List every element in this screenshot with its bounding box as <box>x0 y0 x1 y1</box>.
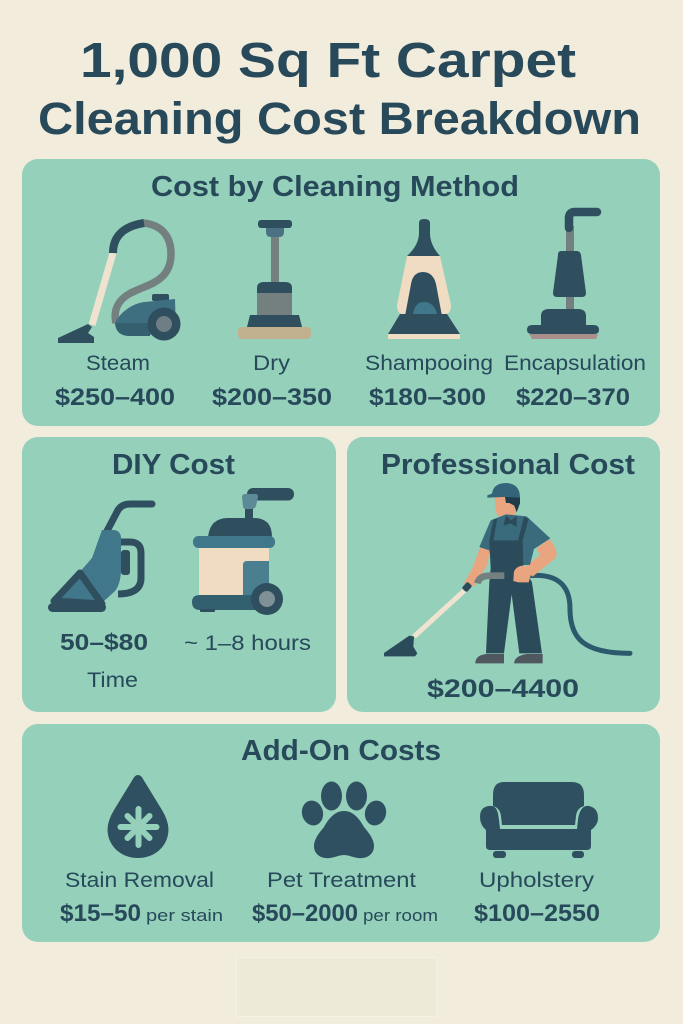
hair <box>505 497 520 512</box>
illustration: worker with carpet wand <box>384 483 630 663</box>
label: stain removal: Stain Removal <box>65 869 214 892</box>
price: pet treatment: $50–2000 <box>252 900 358 927</box>
icon: upright carpet cleaner <box>48 504 152 612</box>
icon: sofa <box>480 782 598 858</box>
price: stain removal <box>60 900 223 927</box>
collar <box>503 516 517 527</box>
label: upholstery: Upholstery <box>479 869 595 892</box>
label: dry: Dry <box>253 352 291 375</box>
icon: stain drop <box>108 775 168 858</box>
price: stain removal: per stain <box>146 906 223 925</box>
title: 1,000 Sq Ft Carpet <box>80 34 576 88</box>
label: DIY price: 50–$80 <box>60 629 148 655</box>
panel: cost by cleaning method <box>22 159 660 426</box>
cap <box>487 483 520 498</box>
neck and head <box>495 497 517 525</box>
shoes <box>475 654 543 663</box>
label: pet treatment: Pet Treatment <box>267 869 416 892</box>
heading: cost by cleaning method: Cost by Cleaning Method <box>151 171 519 203</box>
icon: encapsulation machine <box>527 212 599 339</box>
label: DIY hours: ~ 1–8 hours <box>184 632 311 655</box>
label: steam: Steam <box>86 352 150 375</box>
title <box>38 34 641 144</box>
price: stain removal: $15–50 <box>60 900 141 927</box>
label: shampooing: Shampooing <box>365 352 493 375</box>
icon: shampooer <box>388 219 460 339</box>
price: upholstery: $100–2550 <box>474 900 600 927</box>
icon: floor machine <box>238 220 311 339</box>
price: steam: $250–400 <box>55 384 175 411</box>
right arm <box>523 539 557 577</box>
left arm <box>464 548 490 587</box>
wand and nozzle <box>414 590 465 637</box>
hose grip <box>477 576 505 583</box>
price: pet treatment <box>252 900 438 927</box>
hose <box>530 575 630 653</box>
shirt <box>479 514 550 565</box>
heading: add-on costs: Add-On Costs <box>241 735 441 767</box>
title: Cleaning Cost Breakdown <box>38 93 641 144</box>
overalls <box>486 517 542 653</box>
heading: DIY cost: DIY Cost <box>112 449 235 481</box>
panel: DIY cost <box>22 437 336 712</box>
icon: canister vacuum <box>58 223 180 343</box>
label: time: Time <box>87 669 138 692</box>
panel: add-on costs <box>22 724 660 942</box>
icon: paw print <box>299 782 389 858</box>
hand <box>513 566 532 582</box>
price: pet treatment: per room <box>363 906 438 925</box>
price: professional: $200–4400 <box>427 675 579 703</box>
empty footer box <box>236 958 436 1016</box>
icon: DIY extractor machine <box>192 488 294 615</box>
panel: professional cost <box>347 437 660 712</box>
label: encapsulation: Encapsulation <box>504 352 646 375</box>
price: dry: $200–350 <box>212 384 332 411</box>
price: shampooing: $180–300 <box>369 384 486 411</box>
heading: professional cost: Professional Cost <box>381 449 635 481</box>
price: encapsulation: $220–370 <box>516 384 630 411</box>
